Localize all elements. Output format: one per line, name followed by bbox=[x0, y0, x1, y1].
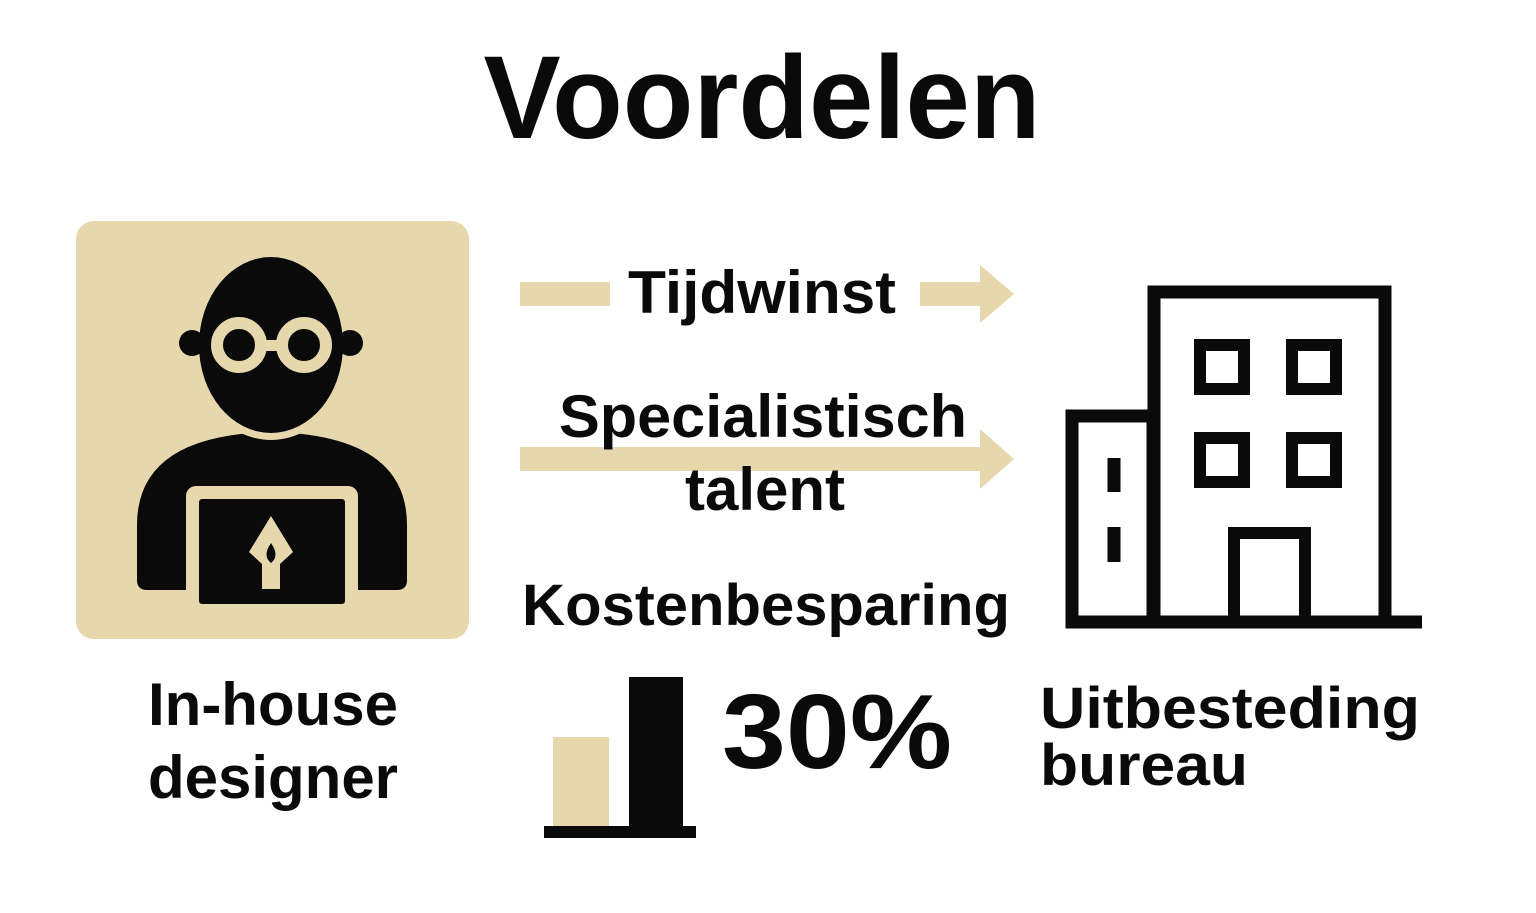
label: uitbesteding bureau: bureau bbox=[1040, 733, 1248, 798]
label: in-house designer bbox=[148, 671, 398, 811]
title: Voordelen bbox=[484, 32, 1040, 164]
text: specialistisch talent: Specialistisch bbox=[559, 383, 967, 450]
text: specialistisch talent bbox=[559, 383, 967, 523]
label: uitbesteding bureau: Uitbesteding bbox=[1040, 676, 1420, 741]
arrow: specialistisch talent bbox=[520, 429, 1014, 489]
icon: office building bbox=[1066, 292, 1422, 622]
bar chart bbox=[544, 677, 696, 838]
arrow: tijdwinst bbox=[520, 265, 1014, 323]
icon: designer body bbox=[137, 432, 407, 590]
stat: 30%: 30% bbox=[722, 673, 952, 791]
text: tijdwinst: Tijdwinst bbox=[628, 259, 896, 326]
icon: head bbox=[179, 250, 363, 440]
panel: in-house designer icon bbox=[76, 221, 469, 639]
label: in-house designer: designer bbox=[148, 744, 398, 811]
label: uitbesteding bureau bbox=[1040, 676, 1420, 798]
text: specialistisch talent: talent bbox=[685, 456, 845, 523]
icon: laptop bbox=[186, 486, 358, 608]
label: in-house designer: In-house bbox=[148, 671, 398, 738]
text: kostenbesparing: Kostenbesparing bbox=[522, 573, 1010, 638]
